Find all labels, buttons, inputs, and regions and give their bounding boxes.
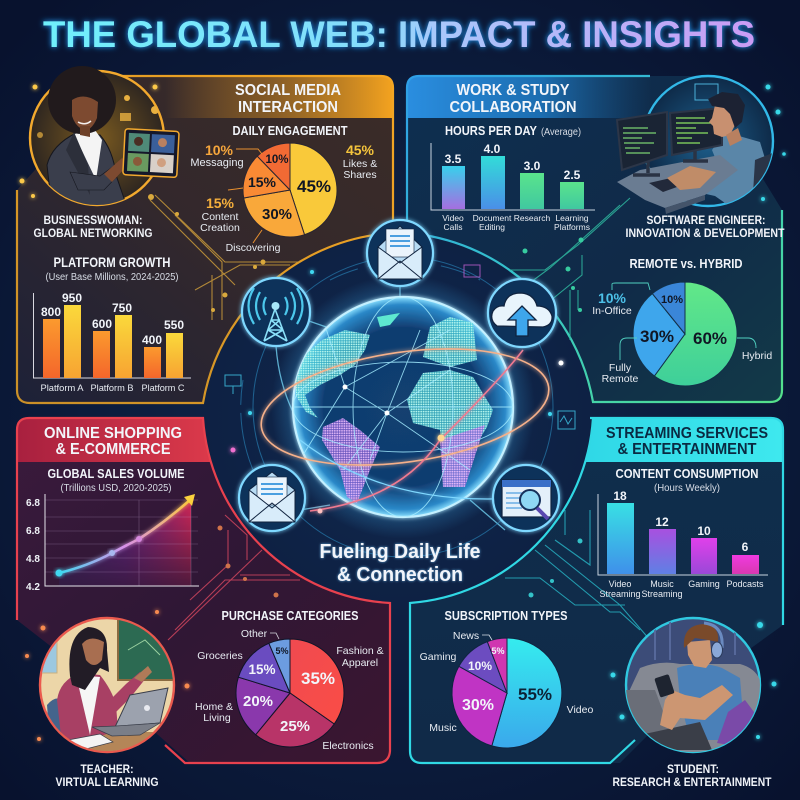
pie chart: subscription types: 5% [491,646,505,656]
bar chart: hours per day: Research [514,213,550,223]
heading: social media: SOCIAL MEDIA [235,82,341,99]
sub heading: platform growth: PLATFORM GROWTH [54,255,170,270]
label: student [612,762,772,789]
heading: streaming services: & ENTERTAINMENT [618,441,757,458]
panel: work and study collaboration [407,76,782,402]
pie callouts: daily engagement: 10% [205,142,234,158]
orbit back rings [241,257,553,557]
icon: envelope left [239,465,305,531]
panel: social media interaction [17,76,393,403]
label: student: STUDENT: [667,762,719,776]
circuit traces: shopping [168,515,300,640]
pie chart: subscription types: 30% [462,697,494,714]
pie labels: purchase categories: Home & [195,701,233,713]
pie labels: purchase categories: Fashion & [336,645,384,657]
sparkle dots: businesswoman [20,84,158,198]
bar chart: platform growth: 550 [164,318,184,332]
pie chart: purchase categories: 20% [243,693,273,710]
heading: social media [235,82,341,116]
bar chart: content consumption: Podcasts [726,579,764,589]
icon: signal tower [242,278,310,346]
sub heading: daily engagement: DAILY ENGAGEMENT [232,124,348,138]
central caption: & Connection [337,564,463,586]
portrait: student [625,618,760,760]
bar chart: hours per day: 2.5 [564,168,581,182]
pie chart: subscription types [452,638,562,748]
bar chart: content consumption: Video [609,579,631,589]
area chart: global sales volume: 6.8 [26,526,40,537]
pie callouts: remote vs hybrid [592,283,772,385]
pie chart: daily engagement: 15% [248,174,277,190]
bar chart: hours per day: 3.5 [445,152,462,166]
circuit traces: work [510,198,630,340]
connector lines to icons [276,286,522,530]
pie labels: subscription types: News [453,630,479,642]
area chart: global sales volume: 4.2 [26,582,40,593]
pie callouts: remote vs hybrid: Hybrid [742,350,772,362]
bar chart: hours per day: 4.0 [484,142,501,156]
pie labels: purchase categories [195,628,384,752]
heading: online shopping [44,425,182,458]
label: businesswoman: GLOBAL NETWORKING [34,226,152,240]
sub heading: platform growth: (User Base Millions, 2024-2025) [46,272,178,283]
label: software engineer [626,213,785,240]
pie callouts: daily engagement: 45% [346,142,375,158]
portrait: teacher [38,616,176,754]
pie callouts: remote vs hybrid: Fully [609,362,632,374]
pie chart: purchase categories: 5% [275,646,289,656]
icon: cloud upload [488,279,556,347]
heading: work and study [450,82,576,116]
icon: envelope top [367,220,433,286]
pie labels: purchase categories: Electronics [322,740,374,752]
sparkle dots: student [610,622,776,739]
sparkle dots: teacher [25,610,190,741]
pie callouts: remote vs hybrid: Remote [602,373,639,385]
sub heading: content consumption: CONTENT CONSUMPTION [616,467,758,481]
bar chart: hours per day: Editing [479,222,505,232]
globe sphere [293,297,513,517]
pie chart: daily engagement: 45% [297,177,331,196]
pie chart: daily engagement [243,143,337,237]
pie callouts: daily engagement: Content [202,211,238,223]
pie callouts: daily engagement: Likes & [343,158,377,170]
label: businesswoman: BUSINESSWOMAN: [44,213,142,227]
bar chart: content consumption: Streaming [641,589,683,599]
sub heading: purchase categories: PURCHASE CATEGORIES [222,609,358,623]
label: teacher: TEACHER: [80,762,134,776]
bar chart: platform growth: Platform B [90,383,134,394]
pie chart: subscription types: 55% [518,685,552,704]
heading: work and study: COLLABORATION [450,99,576,116]
pie labels: purchase categories: Apparel [342,657,378,669]
bar chart: content consumption: 18 [613,489,627,503]
bar chart: platform growth: 400 [142,333,162,347]
bar chart: platform growth: 800 [41,305,61,319]
heading: streaming services: STREAMING SERVICES [606,425,768,442]
pie callouts: daily engagement: Discovering [226,242,281,254]
central caption: Fueling Daily Life [320,541,480,563]
bar chart: content consumption: 6 [742,540,749,554]
bar chart: hours per day: Learning [555,213,589,223]
central caption [320,541,480,586]
heading: work and study: WORK & STUDY [456,82,570,99]
bar chart: platform growth: 600 [92,317,112,331]
bar chart: hours per day: 3.0 [524,159,541,173]
pie labels: subscription types: Music [429,722,457,734]
pie chart: remote vs hybrid [633,282,737,386]
label: teacher: VIRTUAL LEARNING [56,775,158,789]
network lines [293,297,513,517]
pie chart: daily engagement: 30% [262,206,292,223]
title: THE GLOBAL WEB: IMPACT & INSIGHTS [43,14,755,55]
sub heading: global sales volume [48,467,184,494]
pie labels: subscription types: Video [567,704,593,716]
pie callouts: daily engagement: Creation [200,222,240,234]
heading: online shopping: ONLINE SHOPPING [44,425,182,442]
label: teacher [56,762,158,789]
pie chart: purchase categories: 15% [248,662,276,677]
sub heading: content consumption [616,467,758,494]
bar chart: hours per day [431,142,595,232]
pie chart: daily engagement: 10% [265,154,289,166]
orbit rings [254,332,556,514]
area chart: global sales volume [26,494,199,593]
circuit traces: social [148,194,300,320]
sub heading: hours per day: (Average) [541,127,581,138]
small chart icons [225,265,575,429]
sub heading: content consumption: (Hours Weekly) [654,483,720,494]
bar chart: content consumption: Music [650,579,674,589]
pie chart: remote vs hybrid: 30% [640,327,674,346]
pie chart: purchase categories [236,639,344,747]
pie chart: purchase categories: 25% [280,718,310,735]
sub heading: global sales volume: (Trillions USD, 2020-2025) [60,483,172,494]
bar chart: platform growth: Platform C [142,383,185,394]
bar chart: content consumption [598,489,768,599]
bar chart: content consumption: Streaming [599,589,641,599]
pie labels: subscription types: Gaming [420,651,457,663]
pie callouts: daily engagement: 15% [206,195,235,211]
bar chart: content consumption: 12 [655,515,669,529]
bar chart: content consumption: 10 [697,524,711,538]
sub heading: subscription types: SUBSCRIPTION TYPES [444,609,568,623]
pie labels: purchase categories: Living [203,712,231,724]
pie chart: remote vs hybrid: 60% [693,329,727,348]
continents [293,297,513,517]
bar chart: hours per day: Calls [444,222,462,232]
pie chart: remote vs hybrid: 10% [661,294,683,306]
sparkle dots: software engineer [761,84,786,201]
sub heading: platform growth [46,255,178,283]
pie chart: purchase categories: 35% [301,669,335,688]
pie chart: subscription types: 10% [468,659,492,673]
bar chart: platform growth [34,291,191,394]
bar chart: platform growth: 750 [112,301,132,315]
bar chart: content consumption: Gaming [688,579,720,589]
pie callouts: remote vs hybrid: In-Office [592,305,632,317]
bar chart: hours per day: Platforms [554,222,590,232]
pie labels: purchase categories: Other [241,628,268,640]
heading: social media: INTERACTION [238,99,338,116]
pie callouts: daily engagement [190,142,377,254]
heading: streaming services [606,425,768,458]
sub heading: hours per day: HOURS PER DAY [445,124,538,138]
area chart: global sales volume: 6.8 [26,498,40,509]
sub heading: global sales volume: GLOBAL SALES VOLUME [48,467,184,481]
label: software engineer: SOFTWARE ENGINEER: [646,213,766,227]
bar chart: hours per day: Document [473,213,512,223]
pie labels: subscription types [420,630,593,734]
icon: browser search [493,465,559,531]
panel: online shopping and e-commerce [17,418,390,763]
tablet with video call [123,129,179,177]
pie callouts: remote vs hybrid: 10% [598,290,627,306]
bar chart: hours per day: Video [442,213,464,223]
portrait: businesswoman [30,66,179,210]
bar chart: platform growth: 950 [62,291,82,305]
label: student: RESEARCH & ENTERTAINMENT [612,775,772,789]
label: businesswoman [34,213,152,240]
floating node dots [230,270,564,452]
center hub: globe [225,257,575,557]
area chart: global sales volume: 4.8 [26,554,40,565]
bar chart: platform growth: Platform A [40,383,84,394]
portrait: software engineer [617,76,780,214]
panel: streaming services and entertainment [410,418,783,763]
circuit traces: streaming [505,510,650,640]
sub heading: remote vs hybrid: REMOTE vs. HYBRID [630,257,742,271]
pie callouts: daily engagement: Shares [343,169,377,181]
pie callouts: daily engagement: Messaging [190,157,244,169]
pie labels: purchase categories: Groceries [197,650,243,662]
heading: online shopping: & E-COMMERCE [56,441,170,458]
